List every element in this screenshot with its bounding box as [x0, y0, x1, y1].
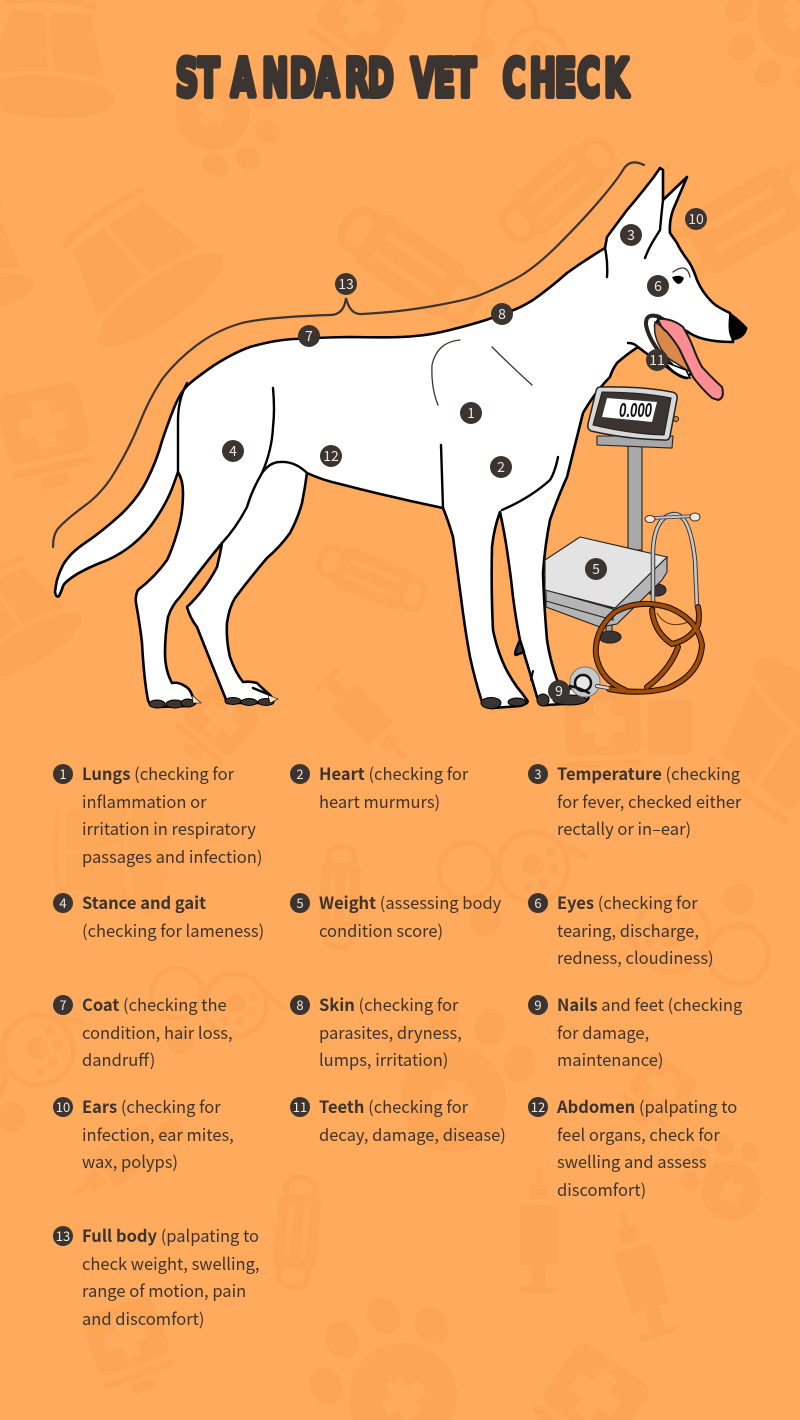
item 4: stance and gait: 4 [59, 893, 67, 912]
item 10: ears: Ears (checking for [82, 1094, 221, 1118]
item 11: teeth: 11 [293, 1097, 307, 1116]
dog mouth and tongue [646, 316, 723, 400]
marker badges: 9 [555, 681, 563, 701]
item 1: lungs: 1 [59, 764, 67, 783]
item 7: coat [53, 992, 233, 1071]
item 8: skin: Skin (checking for [319, 992, 458, 1016]
item 10: ears: wax, polyps) [82, 1149, 178, 1173]
marker badges: 5 [592, 559, 600, 579]
item 9: nails: for damage, [557, 1020, 649, 1044]
scale platform [545, 537, 667, 643]
item 10: ears [53, 1094, 234, 1173]
item 2: heart: Heart (checking for [319, 761, 468, 785]
item 12: abdomen [528, 1094, 737, 1201]
marker badges: 6 [654, 276, 662, 296]
item 10: ears: 10 [56, 1097, 70, 1116]
item 12: abdomen: discomfort) [557, 1177, 646, 1201]
stethoscope chest piece [570, 667, 608, 697]
item 3: temperature: Temperature (checking [557, 761, 740, 785]
marker badges: 11 [649, 350, 665, 370]
item 3: temperature: rectally or in–ear) [557, 816, 691, 840]
item 3: temperature [528, 761, 742, 840]
dog body [55, 168, 733, 708]
item 13: full body: check weight, swelling, [82, 1251, 259, 1275]
item 9: nails: Nails and feet (checking [557, 992, 742, 1016]
scale pole [628, 446, 642, 550]
item 4: stance and gait: (checking for lameness) [82, 918, 264, 942]
item 9: nails: maintenance) [557, 1047, 663, 1071]
item 10: ears: infection, ear mites, [82, 1122, 234, 1146]
item 8: skin: parasites, dryness, [319, 1020, 462, 1044]
item 12: abdomen: feel organs, check for [557, 1122, 720, 1146]
item 13: full body: Full body (palpating to [82, 1223, 259, 1247]
item 12: abdomen: 12 [531, 1097, 545, 1116]
marker badges: 7 [305, 326, 313, 346]
marker badges: 2 [497, 457, 505, 477]
item 2: heart: 2 [296, 764, 304, 783]
item 1: lungs: Lungs (checking for [82, 761, 234, 785]
item 2: heart [290, 761, 468, 813]
marker badges: 13 [338, 274, 354, 294]
weighing scale [545, 387, 678, 643]
item 6: eyes: tearing, discharge, [557, 918, 699, 942]
item 7: coat: Coat (checking the [82, 992, 227, 1016]
item 8: skin: lumps, irritation) [319, 1047, 448, 1071]
marker badges: 3 [627, 225, 635, 245]
item 6: eyes [528, 890, 714, 969]
item 6: eyes: 6 [534, 893, 542, 912]
item 1: lungs [53, 761, 262, 868]
dog paws [149, 694, 587, 708]
item 5: weight [290, 890, 501, 942]
marker badges: 12 [323, 446, 339, 466]
scale display [588, 387, 678, 448]
item 12: abdomen: Abdomen (palpating to [557, 1094, 737, 1118]
item 3: temperature: for fever, checked either [557, 789, 741, 813]
item 1: lungs: irritation in respiratory [82, 816, 256, 840]
item 5: weight: Weight (assessing body [319, 890, 501, 914]
dog nose [729, 313, 747, 340]
item 9: nails: 9 [534, 995, 542, 1014]
item 11: teeth [290, 1094, 506, 1146]
item 5: weight: 5 [296, 893, 304, 912]
title: STANDARD VET CHECK [176, 49, 630, 109]
item 7: coat: 7 [59, 995, 67, 1014]
dog claws [192, 695, 278, 703]
item 13: full body: and discomfort) [82, 1306, 204, 1330]
item 8: skin [290, 992, 462, 1071]
item 13: full body: range of motion, pain [82, 1278, 246, 1302]
item 1: lungs: inflammation or [82, 789, 206, 813]
item 8: skin: 8 [296, 995, 304, 1014]
marker badges: 4 [229, 441, 237, 461]
item 7: coat: condition, hair loss, [82, 1020, 233, 1044]
marker badges: 10 [688, 209, 704, 229]
item 6: eyes: Eyes (checking for [557, 890, 698, 914]
item 6: eyes: redness, cloudiness) [557, 945, 714, 969]
item 2: heart: heart murmurs) [319, 789, 440, 813]
item 9: nails [528, 992, 742, 1071]
item 4: stance and gait: Stance and gait [82, 890, 206, 914]
dog inner contour lines [178, 200, 663, 695]
item 5: weight: condition score) [319, 918, 443, 942]
item 13: full body [53, 1223, 259, 1330]
stethoscope [570, 513, 702, 697]
marker badges [222, 208, 707, 702]
item 7: coat: dandruff) [82, 1047, 155, 1071]
item 12: abdomen: swelling and assess [557, 1149, 707, 1173]
full body bracket line [53, 162, 644, 547]
item 3: temperature: 3 [534, 764, 542, 783]
item 11: teeth: Teeth (checking for [319, 1094, 468, 1118]
marker badges: 1 [467, 403, 475, 423]
item 11: teeth: decay, damage, disease) [319, 1122, 506, 1146]
marker badges: 8 [498, 304, 506, 324]
item 4: stance and gait [53, 890, 264, 942]
item 13: full body: 13 [56, 1226, 70, 1245]
dog eye [672, 276, 684, 284]
scale display: 0.000 [619, 400, 652, 422]
illustration: dog with scale and stethoscope [52, 161, 748, 710]
item 1: lungs: passages and infection) [82, 844, 262, 868]
